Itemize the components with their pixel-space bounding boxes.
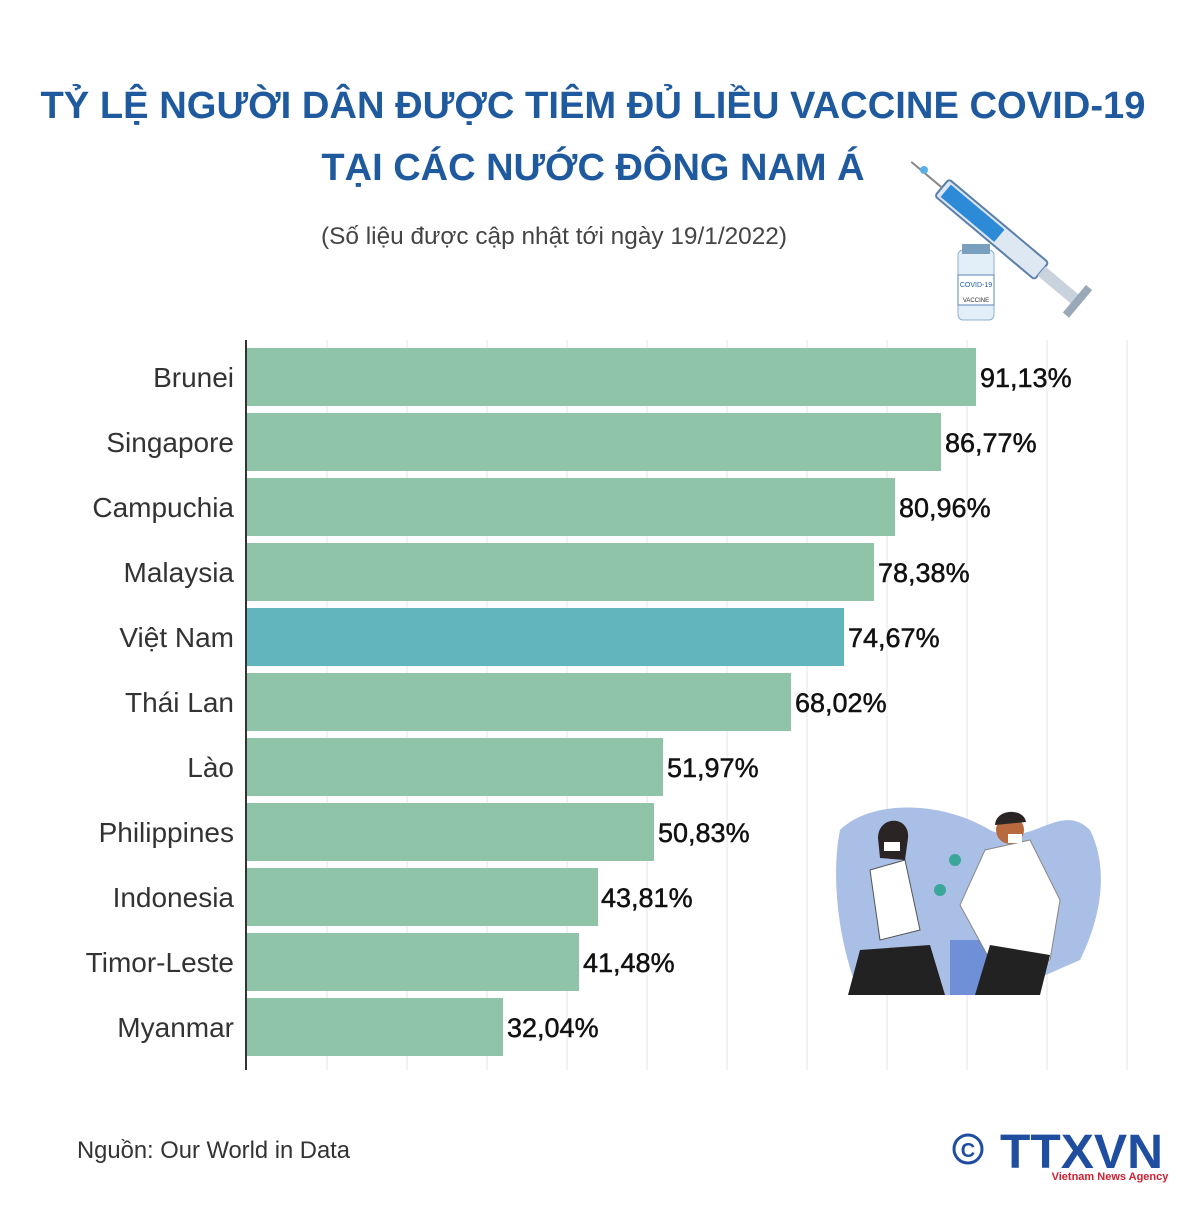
bar chart: 80,96%	[899, 493, 991, 523]
grid lines	[327, 340, 1127, 1070]
bar chart: Thái Lan	[125, 687, 234, 718]
icon: syringe and vial: COVID-19	[960, 282, 992, 289]
bar chart: Philippines	[99, 817, 234, 848]
bar chart: Campuchia	[92, 492, 234, 523]
bar chart: 41,48%	[583, 948, 675, 978]
bar chart: 32,04%	[507, 1013, 599, 1043]
bar chart: 86,77%	[945, 428, 1037, 458]
illustration: vaccination	[836, 808, 1101, 995]
bar chart: 91,13%	[980, 363, 1072, 393]
bar chart: 50,83%	[658, 818, 750, 848]
bar chart: Brunei	[153, 362, 234, 393]
icon: syringe and vial	[900, 148, 1092, 320]
title: TẠI CÁC NƯỚC ĐÔNG NAM Á	[321, 144, 865, 189]
bar chart: Singapore	[106, 427, 234, 458]
title: TỶ LỆ NGƯỜI DÂN ĐƯỢC TIÊM ĐỦ LIỀU VACCINE COVID-19	[40, 83, 1146, 127]
logo: TTXVN: C	[961, 1140, 975, 1162]
title	[40, 83, 1146, 189]
bar chart: Malaysia	[124, 557, 234, 588]
bar chart: Timor-Leste	[86, 947, 234, 978]
bar chart: Lào	[187, 752, 234, 783]
bar chart: Việt Nam	[119, 622, 234, 653]
axis	[245, 340, 247, 1070]
bar chart: 78,38%	[878, 558, 970, 588]
subtitle: (Số liệu được cập nhật tới ngày 19/1/2022)	[321, 223, 787, 250]
bar chart: Myanmar	[117, 1012, 234, 1043]
bar chart	[86, 348, 1072, 1056]
bar chart: Indonesia	[113, 882, 234, 913]
bar chart: 74,67%	[848, 623, 940, 653]
icon: syringe and vial: VACCINE	[963, 298, 989, 304]
bar chart: 68,02%	[795, 688, 887, 718]
source: Nguồn: Our World in Data	[77, 1137, 351, 1164]
bar chart: 43,81%	[601, 883, 693, 913]
bar chart: 51,97%	[667, 753, 759, 783]
logo: TTXVN	[954, 1126, 1169, 1183]
logo: TTXVN: Vietnam News Agency	[1052, 1171, 1169, 1183]
logo: TTXVN: TTXVN	[1000, 1126, 1163, 1179]
